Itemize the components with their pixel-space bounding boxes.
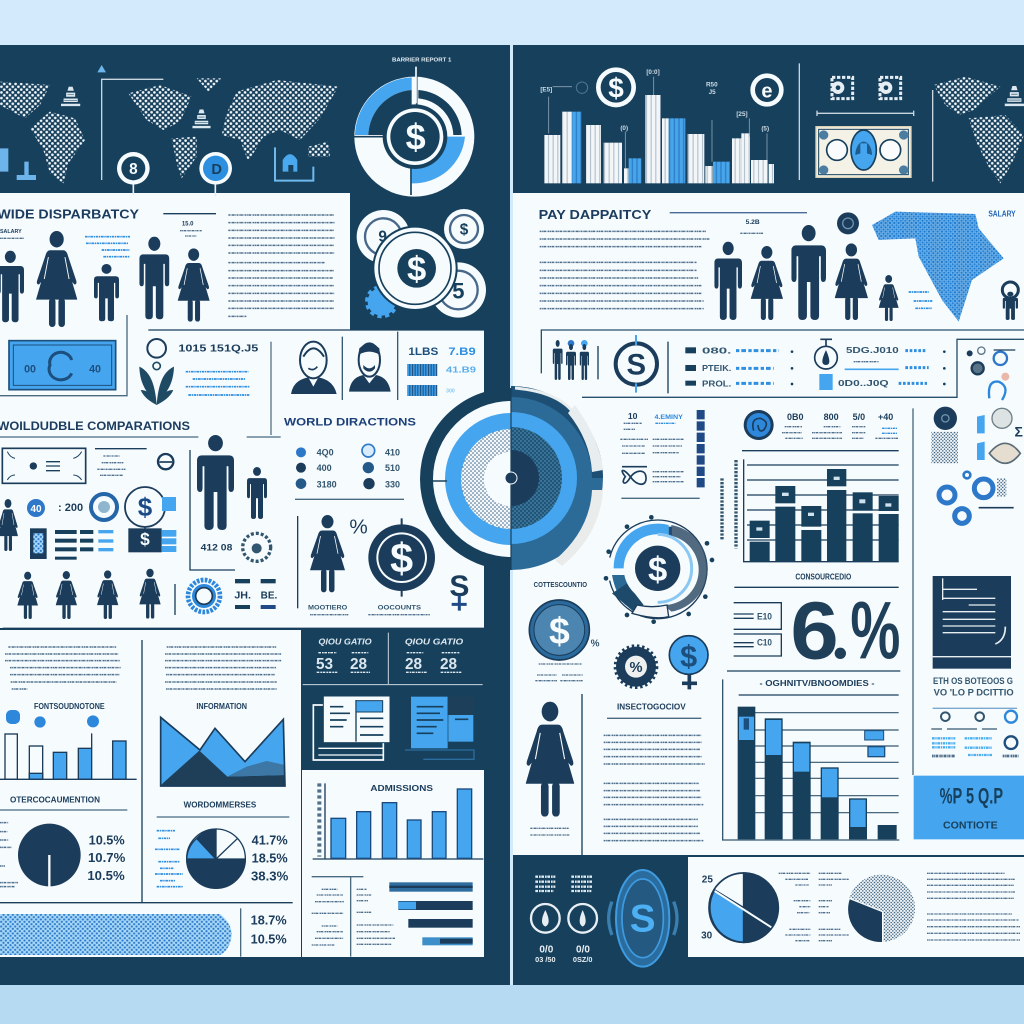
map: dotted right bbox=[934, 77, 1024, 183]
captions bbox=[308, 605, 430, 615]
chart: small bars bbox=[0, 733, 137, 779]
heading: pie left: OTERCOCAUMENTION bbox=[10, 795, 100, 805]
labels beside hbars bbox=[312, 889, 395, 945]
underline bbox=[157, 815, 289, 819]
label: COTTESCOUNTIO bbox=[534, 580, 587, 589]
stat: big six percent bbox=[790, 585, 900, 676]
values bbox=[251, 834, 288, 884]
stats: world directions grid: 330 bbox=[385, 479, 400, 489]
caption bbox=[933, 676, 1014, 698]
chart: pie with segments bbox=[187, 829, 245, 888]
captions: MOOTIERO bbox=[308, 605, 347, 612]
note: salary label: SALARY bbox=[0, 229, 22, 235]
legend lines blue bbox=[155, 831, 183, 887]
underline bbox=[933, 706, 1017, 710]
divider bbox=[296, 516, 300, 608]
blue text lines bbox=[186, 372, 250, 395]
icon: banknote bbox=[816, 127, 911, 177]
panel: right white sections bbox=[513, 193, 1024, 957]
text column: mid bbox=[620, 411, 684, 484]
icon: coin cluster: 9 bbox=[378, 229, 387, 246]
icon: coin cluster: $ bbox=[460, 221, 469, 238]
pie labels bbox=[701, 875, 713, 942]
small label: SALARY bbox=[988, 210, 1016, 219]
section: bottom-right quadrant bbox=[526, 515, 1024, 967]
stat rows right bbox=[838, 345, 946, 388]
title: world directions: WORLD DIRACTIONS bbox=[284, 417, 416, 429]
stat cards dark: 28 bbox=[350, 656, 368, 673]
underline bbox=[742, 449, 899, 453]
divider top of mid band bbox=[148, 328, 484, 332]
stat cards dark bbox=[303, 633, 483, 685]
numbers block: 41.B9 bbox=[446, 366, 477, 375]
figure: man 2 bbox=[791, 225, 826, 320]
icon: blue dollar coin: $ bbox=[549, 609, 570, 651]
icon: S coin bbox=[616, 335, 657, 393]
figure: small woman bbox=[879, 275, 899, 321]
stat rows right: 5DG.J010 bbox=[846, 345, 899, 355]
icon: blue oval dollar: S bbox=[630, 898, 656, 941]
divider and small note: 15.0 bbox=[182, 221, 194, 227]
icon: document bbox=[30, 528, 47, 559]
chart: pie blue dark white bbox=[709, 873, 778, 942]
section: bottom-left quadrant bbox=[0, 515, 484, 957]
icon: dollar coin with card bbox=[125, 487, 176, 535]
icon: gear badges bbox=[832, 77, 901, 99]
figure row: four women bbox=[17, 569, 161, 619]
divider and heading bbox=[312, 877, 363, 957]
title: pay disparity: PAY DAPPAITCY bbox=[539, 208, 652, 222]
divider bbox=[911, 408, 915, 775]
icon: dark document bbox=[930, 576, 1011, 669]
panel: left white sections bbox=[0, 193, 484, 957]
note: salary label bbox=[0, 229, 24, 238]
icon: coin cluster bbox=[357, 209, 486, 318]
icon: blue dollar coin bbox=[529, 600, 589, 660]
icon: three small people bbox=[553, 340, 589, 380]
icon: ring stat beside note: 412 08 bbox=[201, 543, 232, 553]
divider bbox=[727, 669, 900, 673]
stats: bottom dark panel bbox=[531, 877, 597, 964]
figure: man 1 bbox=[714, 242, 742, 320]
icon: bell with bar bbox=[815, 339, 837, 390]
stat text: 1015 151Q.J5 bbox=[178, 344, 259, 355]
section: person and coin row bbox=[0, 435, 267, 570]
underline bbox=[295, 497, 404, 501]
frame line bbox=[102, 79, 163, 180]
heading: CONSOURCEDIO bbox=[795, 572, 852, 582]
values: 38.3% bbox=[251, 870, 288, 884]
icon: card with dollar: $ bbox=[140, 529, 150, 549]
figure: tall woman bbox=[36, 231, 77, 327]
underline bbox=[670, 211, 807, 215]
blue notes on map bbox=[909, 292, 933, 308]
text block: left column bbox=[5, 647, 121, 689]
chart: area bbox=[161, 717, 285, 786]
icon: blue swirl coin bbox=[744, 410, 774, 440]
values bbox=[87, 834, 125, 883]
icon: documents white bbox=[313, 696, 390, 760]
numbers block: 300 bbox=[446, 389, 455, 395]
stat rows left: 080. bbox=[702, 346, 731, 356]
icon: blue banknote: 00 bbox=[24, 363, 36, 375]
icon: pin coin bbox=[117, 152, 150, 195]
figure: woman large bbox=[526, 702, 574, 817]
note and ring bbox=[95, 449, 173, 475]
stats: bottom dark panel: 0/0 bbox=[539, 945, 554, 956]
divider bbox=[173, 584, 177, 615]
section: top-left quadrant bbox=[0, 57, 486, 499]
values: 18.7% bbox=[251, 914, 287, 928]
numbers block bbox=[407, 346, 477, 396]
icon: dollar coin large: $ bbox=[390, 536, 413, 582]
stat cards dark: QIOU GATIO bbox=[318, 636, 372, 646]
icon: blue badge with stat bbox=[27, 494, 117, 520]
chart: donut with dollar: $ bbox=[406, 116, 426, 157]
dividers between portraits bbox=[342, 332, 398, 400]
stat rows left: PROL. bbox=[702, 379, 731, 389]
stats: small columns: JH. bbox=[234, 590, 251, 601]
figure: small man bbox=[247, 467, 267, 519]
icon: pyramid small left bbox=[61, 87, 80, 106]
panel: right navy board bbox=[513, 45, 1024, 985]
stats: world directions grid: 410 bbox=[385, 448, 400, 458]
note rows bbox=[734, 603, 781, 656]
frame around banknote bbox=[0, 315, 127, 396]
figure: woman 2 bbox=[835, 243, 868, 320]
icon: dollar coin large bbox=[368, 518, 435, 597]
legend lines bbox=[0, 823, 18, 887]
heading: area chart: INFORMATION bbox=[196, 702, 247, 711]
chart callouts bbox=[540, 69, 769, 168]
stats: rings and lines bbox=[931, 711, 1019, 756]
stat cards dark: 28 bbox=[440, 656, 458, 673]
chart: blue bars bbox=[313, 783, 483, 859]
icon: ring stat beside note bbox=[201, 533, 271, 561]
caption bbox=[530, 828, 569, 835]
heading: pie right: WORDOMMERSES bbox=[184, 800, 257, 810]
values: 41.7% bbox=[252, 834, 288, 848]
stats: bottom dark panel: 0/0 bbox=[576, 945, 590, 956]
divider bbox=[598, 342, 668, 393]
figure: small man bbox=[94, 264, 119, 321]
label: percent: % bbox=[349, 515, 368, 538]
values: 10.7% bbox=[88, 851, 125, 865]
note rows: E10 bbox=[757, 611, 772, 621]
chart callouts: R50 bbox=[706, 82, 718, 89]
icon: dark gear: % bbox=[629, 660, 643, 676]
pie labels: 30 bbox=[701, 931, 713, 942]
icon: pyramid small center bbox=[192, 109, 211, 128]
icon: blue banknote bbox=[9, 341, 116, 390]
note bbox=[740, 219, 764, 233]
icon: documents blue bbox=[405, 697, 474, 759]
icon: blue monument bbox=[0, 148, 36, 180]
icon: up arrow bbox=[97, 65, 106, 72]
icon: portrait left bbox=[291, 342, 337, 394]
stats above chart bbox=[782, 412, 898, 438]
chart: dark column chart bbox=[744, 459, 899, 562]
icon: euro coin: e bbox=[761, 80, 773, 102]
underline bbox=[607, 716, 701, 720]
figure: woman 1 bbox=[751, 246, 783, 320]
numbers block: 1LBS bbox=[408, 346, 439, 358]
text column: mid: 4.EMINY bbox=[654, 415, 683, 421]
icon: pin coin: 8 bbox=[129, 161, 138, 178]
chart: ring gauge with dollar bbox=[604, 515, 714, 624]
divider bbox=[580, 694, 584, 855]
figure: man center bbox=[139, 237, 169, 319]
stats above chart: +40 bbox=[878, 412, 893, 422]
text block: middle column bbox=[165, 647, 282, 689]
pie labels: 25 bbox=[702, 875, 713, 886]
values bbox=[251, 914, 287, 946]
icons above bars bbox=[6, 710, 99, 728]
frame: stats row bbox=[541, 330, 1024, 397]
figure: small person at edge bbox=[0, 499, 18, 551]
text column: mid: 10 bbox=[628, 411, 638, 421]
chart: central concentric dial bbox=[419, 386, 603, 570]
divider bbox=[239, 908, 243, 957]
icon: gender dollar: S bbox=[449, 570, 469, 603]
values: 10.5% bbox=[251, 932, 287, 946]
chart: striped skyline bars bbox=[544, 95, 774, 183]
stats: bottom dark panel: 0SZ/0 bbox=[573, 955, 592, 964]
icon: dark gear bbox=[616, 647, 656, 687]
icon: pin blue coin bbox=[199, 152, 232, 197]
figure: man left bbox=[0, 251, 24, 322]
panel: left navy board bbox=[0, 45, 510, 985]
stat rows right: 0D0..J0Q bbox=[838, 378, 889, 388]
figure: person right edge bbox=[1002, 282, 1018, 320]
icon: pin blue coin: D bbox=[211, 162, 222, 178]
chart axis bbox=[723, 679, 899, 840]
stat cards dark: QIOU GATIO bbox=[405, 636, 463, 646]
stat cards dark: 28 bbox=[405, 656, 423, 673]
chart: dark pie bbox=[18, 824, 81, 887]
stat cards dark: 53 bbox=[316, 656, 333, 673]
bar rows bbox=[55, 530, 113, 560]
dial left half bbox=[420, 388, 510, 570]
icon: pyramid bbox=[1005, 86, 1024, 106]
chart: ring gauge with dollar: $ bbox=[648, 551, 667, 589]
underline bbox=[621, 496, 700, 500]
icon cluster: right column: Σ bbox=[1014, 424, 1023, 440]
icon: female symbol with dollar bbox=[669, 636, 708, 689]
icon cluster: top right bbox=[967, 347, 1015, 400]
section: top-right quadrant bbox=[539, 63, 1024, 775]
underline bbox=[0, 808, 127, 812]
chart callouts: J5 bbox=[709, 89, 716, 96]
icon cluster: right column bbox=[931, 407, 1023, 523]
map: world dotted bbox=[128, 78, 338, 178]
chart callouts: (0) bbox=[620, 125, 628, 132]
stats: world directions grid: 4Q0 bbox=[317, 448, 334, 458]
heading: - OGHNITV/BNOOMDIES - bbox=[759, 679, 875, 688]
frame line bbox=[190, 450, 235, 570]
note: 5.2B bbox=[746, 219, 760, 226]
icon: blue bracket house bbox=[275, 147, 313, 181]
figure: tall man bbox=[197, 435, 234, 530]
text block bbox=[604, 735, 705, 841]
note: blue legend bbox=[85, 237, 130, 257]
stats above chart: 800 bbox=[824, 412, 839, 422]
stats: small columns bbox=[234, 579, 278, 609]
icon: female symbol with dollar: $ bbox=[680, 640, 697, 674]
stats: world directions grid: 400 bbox=[317, 463, 332, 473]
map strip: dotted blue band bbox=[0, 914, 232, 955]
figure: woman bbox=[310, 515, 345, 592]
stats above chart: 5/0 bbox=[853, 412, 865, 422]
icon: circle and plant bbox=[139, 339, 174, 405]
values: 10.5% bbox=[87, 869, 125, 883]
caption: ETH OS BOTEOOS G bbox=[933, 676, 1013, 686]
small table bbox=[779, 873, 849, 941]
captions: OOCOUNTS bbox=[378, 605, 422, 612]
icon: dollar coin with card: $ bbox=[138, 492, 153, 522]
stats: world directions grid: 3180 bbox=[317, 479, 337, 489]
callout: blue contact box: CONTIOTE bbox=[943, 821, 998, 832]
figure: woman center bbox=[178, 248, 210, 322]
icon: blue banknote: 40 bbox=[89, 363, 101, 375]
heading: bars: FONTSOUDNOTONE bbox=[34, 702, 105, 711]
icon: blue gear bbox=[188, 580, 220, 612]
icon: dollar coin bbox=[596, 67, 636, 107]
chart callouts: (5) bbox=[761, 126, 769, 133]
underline bbox=[739, 693, 899, 697]
underline bbox=[734, 585, 899, 589]
icon: outlined banknote bbox=[2, 448, 86, 483]
stats: world directions grid bbox=[296, 444, 400, 489]
divider bbox=[3, 626, 484, 630]
caption under coin bbox=[535, 664, 583, 681]
values: 18.5% bbox=[252, 852, 288, 866]
stats: bottom dark panel: 03 /50 bbox=[535, 955, 556, 964]
label: percent: % bbox=[591, 639, 600, 650]
chart callouts: [25] bbox=[736, 111, 748, 118]
callout: blue contact box bbox=[914, 776, 1024, 839]
chart: horizontal bars bbox=[389, 882, 473, 945]
text block bbox=[927, 873, 1020, 940]
vertical chart labels bbox=[722, 460, 736, 548]
title: worldwide comparisons: WOILDUDBLE COMPARATIONS bbox=[0, 419, 190, 433]
note rows: C10 bbox=[757, 638, 772, 648]
icon: card with dollar bbox=[128, 528, 176, 552]
heading: bar chart: ADMISSIONS bbox=[370, 784, 434, 793]
icon: blue badge with stat: 40 bbox=[30, 504, 42, 515]
icon: S coin: S bbox=[627, 348, 646, 381]
stat: big six percent: 6 bbox=[790, 585, 839, 676]
icon: coin cluster: $ bbox=[407, 251, 426, 289]
divider and small note bbox=[163, 214, 216, 236]
icon: portrait right bbox=[349, 343, 391, 392]
chart: stacked declining bars bbox=[738, 707, 899, 839]
dividers bbox=[799, 63, 933, 182]
map: Americas dotted left bbox=[0, 82, 85, 183]
stat: big six percent: % bbox=[850, 585, 900, 676]
dial right half bbox=[511, 386, 603, 570]
icon: coin cluster: 5 bbox=[452, 278, 464, 303]
dial center dot bbox=[505, 388, 517, 570]
divider vertical bbox=[0, 640, 293, 903]
chart: donut with dollar bbox=[354, 65, 474, 197]
chart callouts: [E5] bbox=[540, 87, 552, 94]
icon: blue badge with stat: : 200 bbox=[58, 502, 83, 514]
heading: INSECTOGOCIOV bbox=[617, 702, 686, 711]
stat rows left: PTEIK. bbox=[702, 363, 731, 373]
divider vertical bbox=[269, 342, 273, 435]
column bar stripes bbox=[689, 410, 713, 488]
numbers block: 7.B9 bbox=[448, 346, 476, 358]
stats above chart: 0B0 bbox=[787, 412, 803, 422]
icon: blue oval dollar bbox=[609, 870, 677, 967]
chart: dotted pie bbox=[847, 875, 915, 943]
text block: pay paragraph bbox=[540, 231, 709, 309]
values: 10.5% bbox=[89, 834, 125, 848]
underline bbox=[0, 435, 281, 439]
stats: world directions grid: 510 bbox=[385, 463, 400, 473]
caption: VO 'LO P DCITTIO bbox=[934, 688, 1014, 698]
stat rows left bbox=[685, 346, 793, 389]
title: wide disparity: WIDE DISPARBATCY bbox=[0, 207, 140, 221]
chart callouts: [0:0] bbox=[646, 69, 660, 76]
map: blue dotted americas bbox=[872, 212, 1004, 322]
stats: small columns: BE. bbox=[261, 590, 278, 601]
icon: dark ring bbox=[837, 212, 859, 234]
text block: disparity paragraph bbox=[228, 215, 335, 316]
icon: dollar coin: $ bbox=[608, 72, 624, 103]
icon: euro coin bbox=[750, 73, 784, 107]
label: donut heading: BARRIER REPORT 1 bbox=[392, 57, 451, 63]
